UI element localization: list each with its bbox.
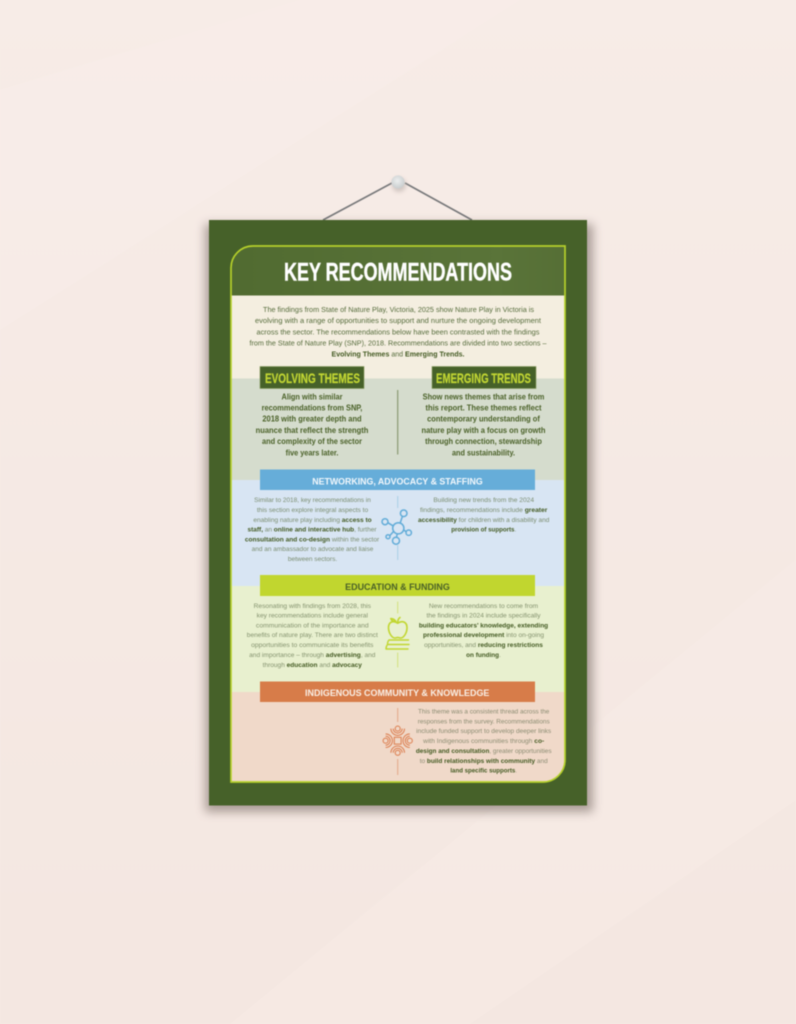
education ribbon: EDUCATION & FUNDING <box>345 581 450 592</box>
education left text: through education and advocacy <box>263 662 362 669</box>
education right text: professional development into on-going <box>423 632 544 639</box>
icon: indigenous community <box>383 708 412 775</box>
intro text: from the State of Nature Play (SNP), 2018. Recommendations are divided into two sections – <box>250 338 547 348</box>
networking right text: accessibility for children with a disability and <box>418 517 550 524</box>
title: KEY RECOMMENDATIONS <box>284 260 512 287</box>
indigenous ribbon: INDIGENOUS COMMUNITY & KNOWLEDGE <box>305 687 489 698</box>
indigenous text: land specific supports. <box>450 768 517 774</box>
networking right text: Building new trends from the 2024 <box>433 497 534 504</box>
emerging trends text: nature play with a focus on growth <box>422 425 546 435</box>
indigenous text: This theme was a consistent thread across the <box>418 708 550 716</box>
education ribbon <box>260 575 535 596</box>
networking left text: between sectors. <box>288 556 337 563</box>
networking right text <box>418 497 550 534</box>
networking left text: enabling nature play including access to <box>253 517 372 524</box>
education left text: opportunities to communicate its benefits <box>251 642 374 649</box>
intro text: evolving with a range of opportunities to support and nurture the ongoing development <box>255 316 542 325</box>
evolving themes text: recommendations from SNP, <box>262 402 362 412</box>
networking left text: consultation and co-design within the sector <box>245 536 380 543</box>
education left text: key recommendations include general <box>257 612 369 620</box>
education left text: communication of the importance and <box>256 622 369 630</box>
education left text: and importance – through advertising, and <box>249 652 376 659</box>
icon: apple on books <box>386 602 409 667</box>
intro text <box>250 305 547 359</box>
indigenous text: include funded support to develop deeper links <box>416 728 552 735</box>
emerging trends text: Show news themes that arise from <box>423 391 544 401</box>
networking left text: staff, an online and interactive hub, further <box>248 527 377 534</box>
evolving themes heading: EVOLVING THEMES <box>265 371 360 386</box>
education left text: benefits of nature play. There are two distinct <box>247 632 378 639</box>
evolving themes text: nuance that reflect the strength <box>256 425 368 435</box>
networking band <box>231 480 565 586</box>
emerging trends text: and sustainability. <box>452 447 515 457</box>
intro band <box>231 296 565 378</box>
evolving themes heading <box>260 366 364 388</box>
education left text: Resonating with findings from 2028, this <box>254 603 372 610</box>
education right text: building educators' knowledge, extending <box>419 622 548 630</box>
indigenous text: to build relationships with community and <box>420 758 548 765</box>
education left text <box>247 603 378 669</box>
emerging trends text: contemporary understanding of <box>427 414 540 424</box>
icon: network <box>382 496 411 560</box>
indigenous ribbon <box>260 682 535 702</box>
evolving themes text: five years later. <box>286 447 338 457</box>
education right text <box>419 603 548 659</box>
inner panel <box>231 246 565 782</box>
networking left text: Similar to 2018, key recommendations in <box>254 497 371 504</box>
indigenous text: design and consultation, greater opportunities <box>416 748 552 755</box>
indigenous band <box>231 692 565 782</box>
networking ribbon <box>260 470 535 490</box>
themes band <box>231 378 565 480</box>
education right text: on funding. <box>466 652 501 659</box>
indigenous text: responses from the survey. Recommendations <box>418 718 550 726</box>
networking ribbon: NETWORKING, ADVOCACY & STAFFING <box>312 475 483 486</box>
networking left text <box>245 497 380 563</box>
intro text: across the sector. The recommendations below have been contrasted with the findings <box>256 327 540 336</box>
poster board <box>209 220 587 806</box>
inner panel border <box>231 246 565 782</box>
networking left text: and an ambassador to advocate and liaise <box>252 546 374 553</box>
education right text: the findings in 2024 include specifically <box>426 612 541 620</box>
education right text: opportunities, and reducing restrictions <box>424 642 543 649</box>
emerging trends text: this report. These themes reflect <box>426 402 542 412</box>
hanging string and pin <box>323 175 472 220</box>
emerging trends heading: EMERGING TRENDS <box>436 371 531 386</box>
emerging trends heading <box>432 366 536 388</box>
indigenous text: with Indigenous communities through co- <box>422 738 544 745</box>
poster shadow <box>205 224 593 812</box>
header band <box>231 246 565 296</box>
intro text: Evolving Themes and Emerging Trends. <box>332 350 464 359</box>
emerging trends text <box>422 391 546 457</box>
networking left text: this section explore integral aspects to <box>257 507 369 514</box>
education right text: New recommendations to come from <box>429 603 538 610</box>
poster <box>209 220 587 806</box>
networking right text: findings, recommendations include greater <box>420 507 548 514</box>
evolving themes text: 2018 with greater depth and <box>262 414 362 424</box>
evolving themes text <box>256 391 368 457</box>
evolving themes text: Align with similar <box>282 391 343 401</box>
education band <box>231 586 565 692</box>
intro text: The findings from State of Nature Play, Victoria, 2025 show Nature Play in Victoria is <box>263 305 534 314</box>
networking right text: provision of supports. <box>451 527 516 534</box>
evolving themes text: and complexity of the sector <box>262 436 363 446</box>
indigenous text <box>416 708 552 774</box>
themes divider <box>397 390 399 454</box>
emerging trends text: through connection, stewardship <box>425 436 542 446</box>
